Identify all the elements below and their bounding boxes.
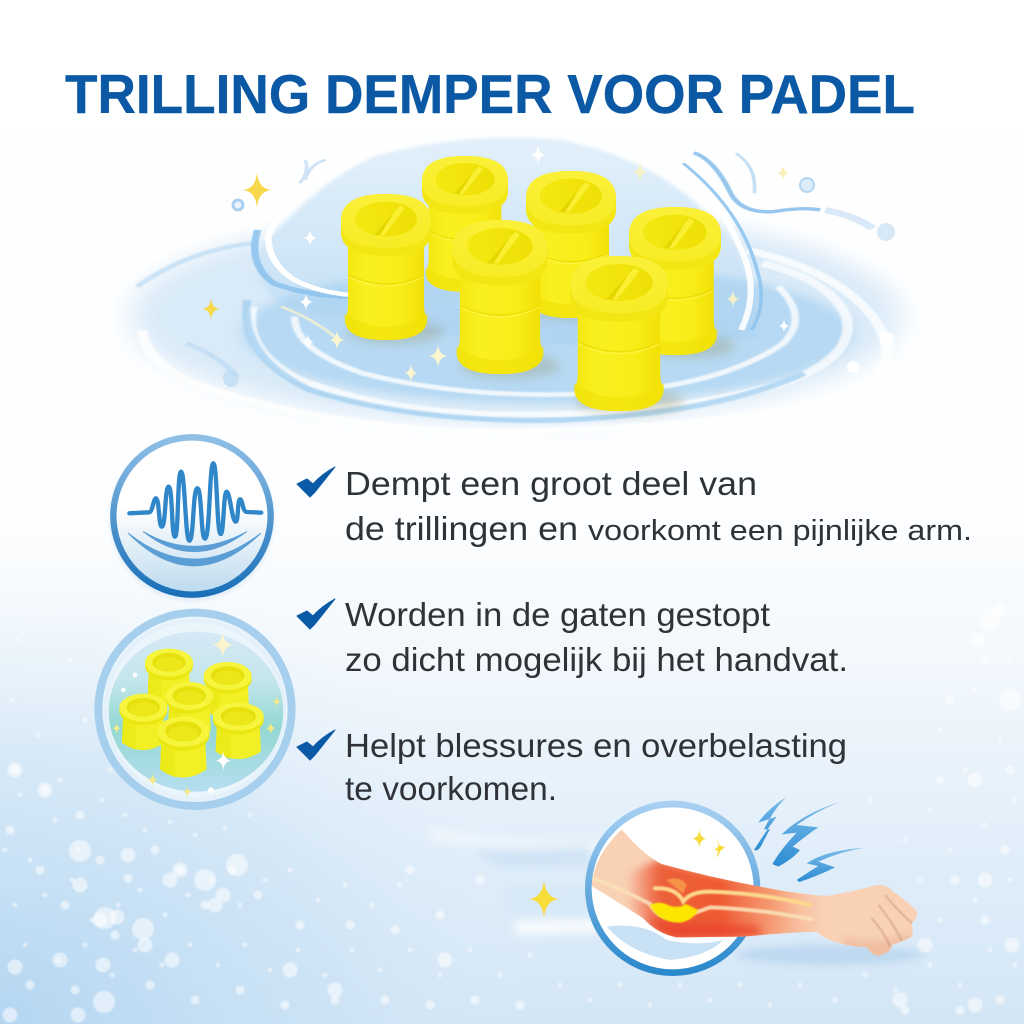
bokeh speckles [5,610,1015,1015]
feature list [297,465,972,807]
ripple in ring [607,926,723,960]
ring [588,804,757,973]
damper front [570,256,668,411]
feature 2 [297,596,848,678]
feature 2: Worden in de gaten gestopt [345,596,770,633]
feature 1: voorkomt een pijnlijke arm. [588,515,972,547]
damper left [341,194,431,340]
feature 3: Helpt blessures en overbelasting [345,727,847,764]
droplets [223,178,895,387]
feature 2: zo dicht mogelijk bij het handvat. [345,641,848,678]
feature 3 [297,727,847,807]
feature icon: vibration wave [109,436,275,601]
arm [592,830,918,956]
lightning bolts [754,797,863,882]
feature 1: de trillingen en [345,510,578,547]
feature 1: Dempt een groot deel van [345,465,757,502]
bottom water ripples [430,830,600,934]
contact shadows [347,300,735,415]
bolt 2 [772,802,840,867]
title: TRILLING DEMPER VOOR PADEL [65,63,915,125]
check icon 1 [297,467,335,497]
check icon 2 [297,599,335,629]
gold sparkle bottom [529,880,559,918]
bolt 3 [797,848,863,882]
damper back right [526,171,616,318]
product: six yellow vibration dampers [341,156,735,415]
water swirl illustration [121,137,899,432]
feature 1 [297,465,972,547]
bolt 1 [754,797,787,850]
damper back left [422,156,508,292]
damper middle [453,220,547,374]
check icon 3 [297,730,335,760]
sparkles around product [202,145,790,382]
arm shadow [737,945,923,965]
damper right [629,207,721,355]
feature 3: te voorkomen. [345,770,557,807]
feature icon: dampers in bubble [98,613,292,806]
arm with painful elbow [587,804,923,973]
